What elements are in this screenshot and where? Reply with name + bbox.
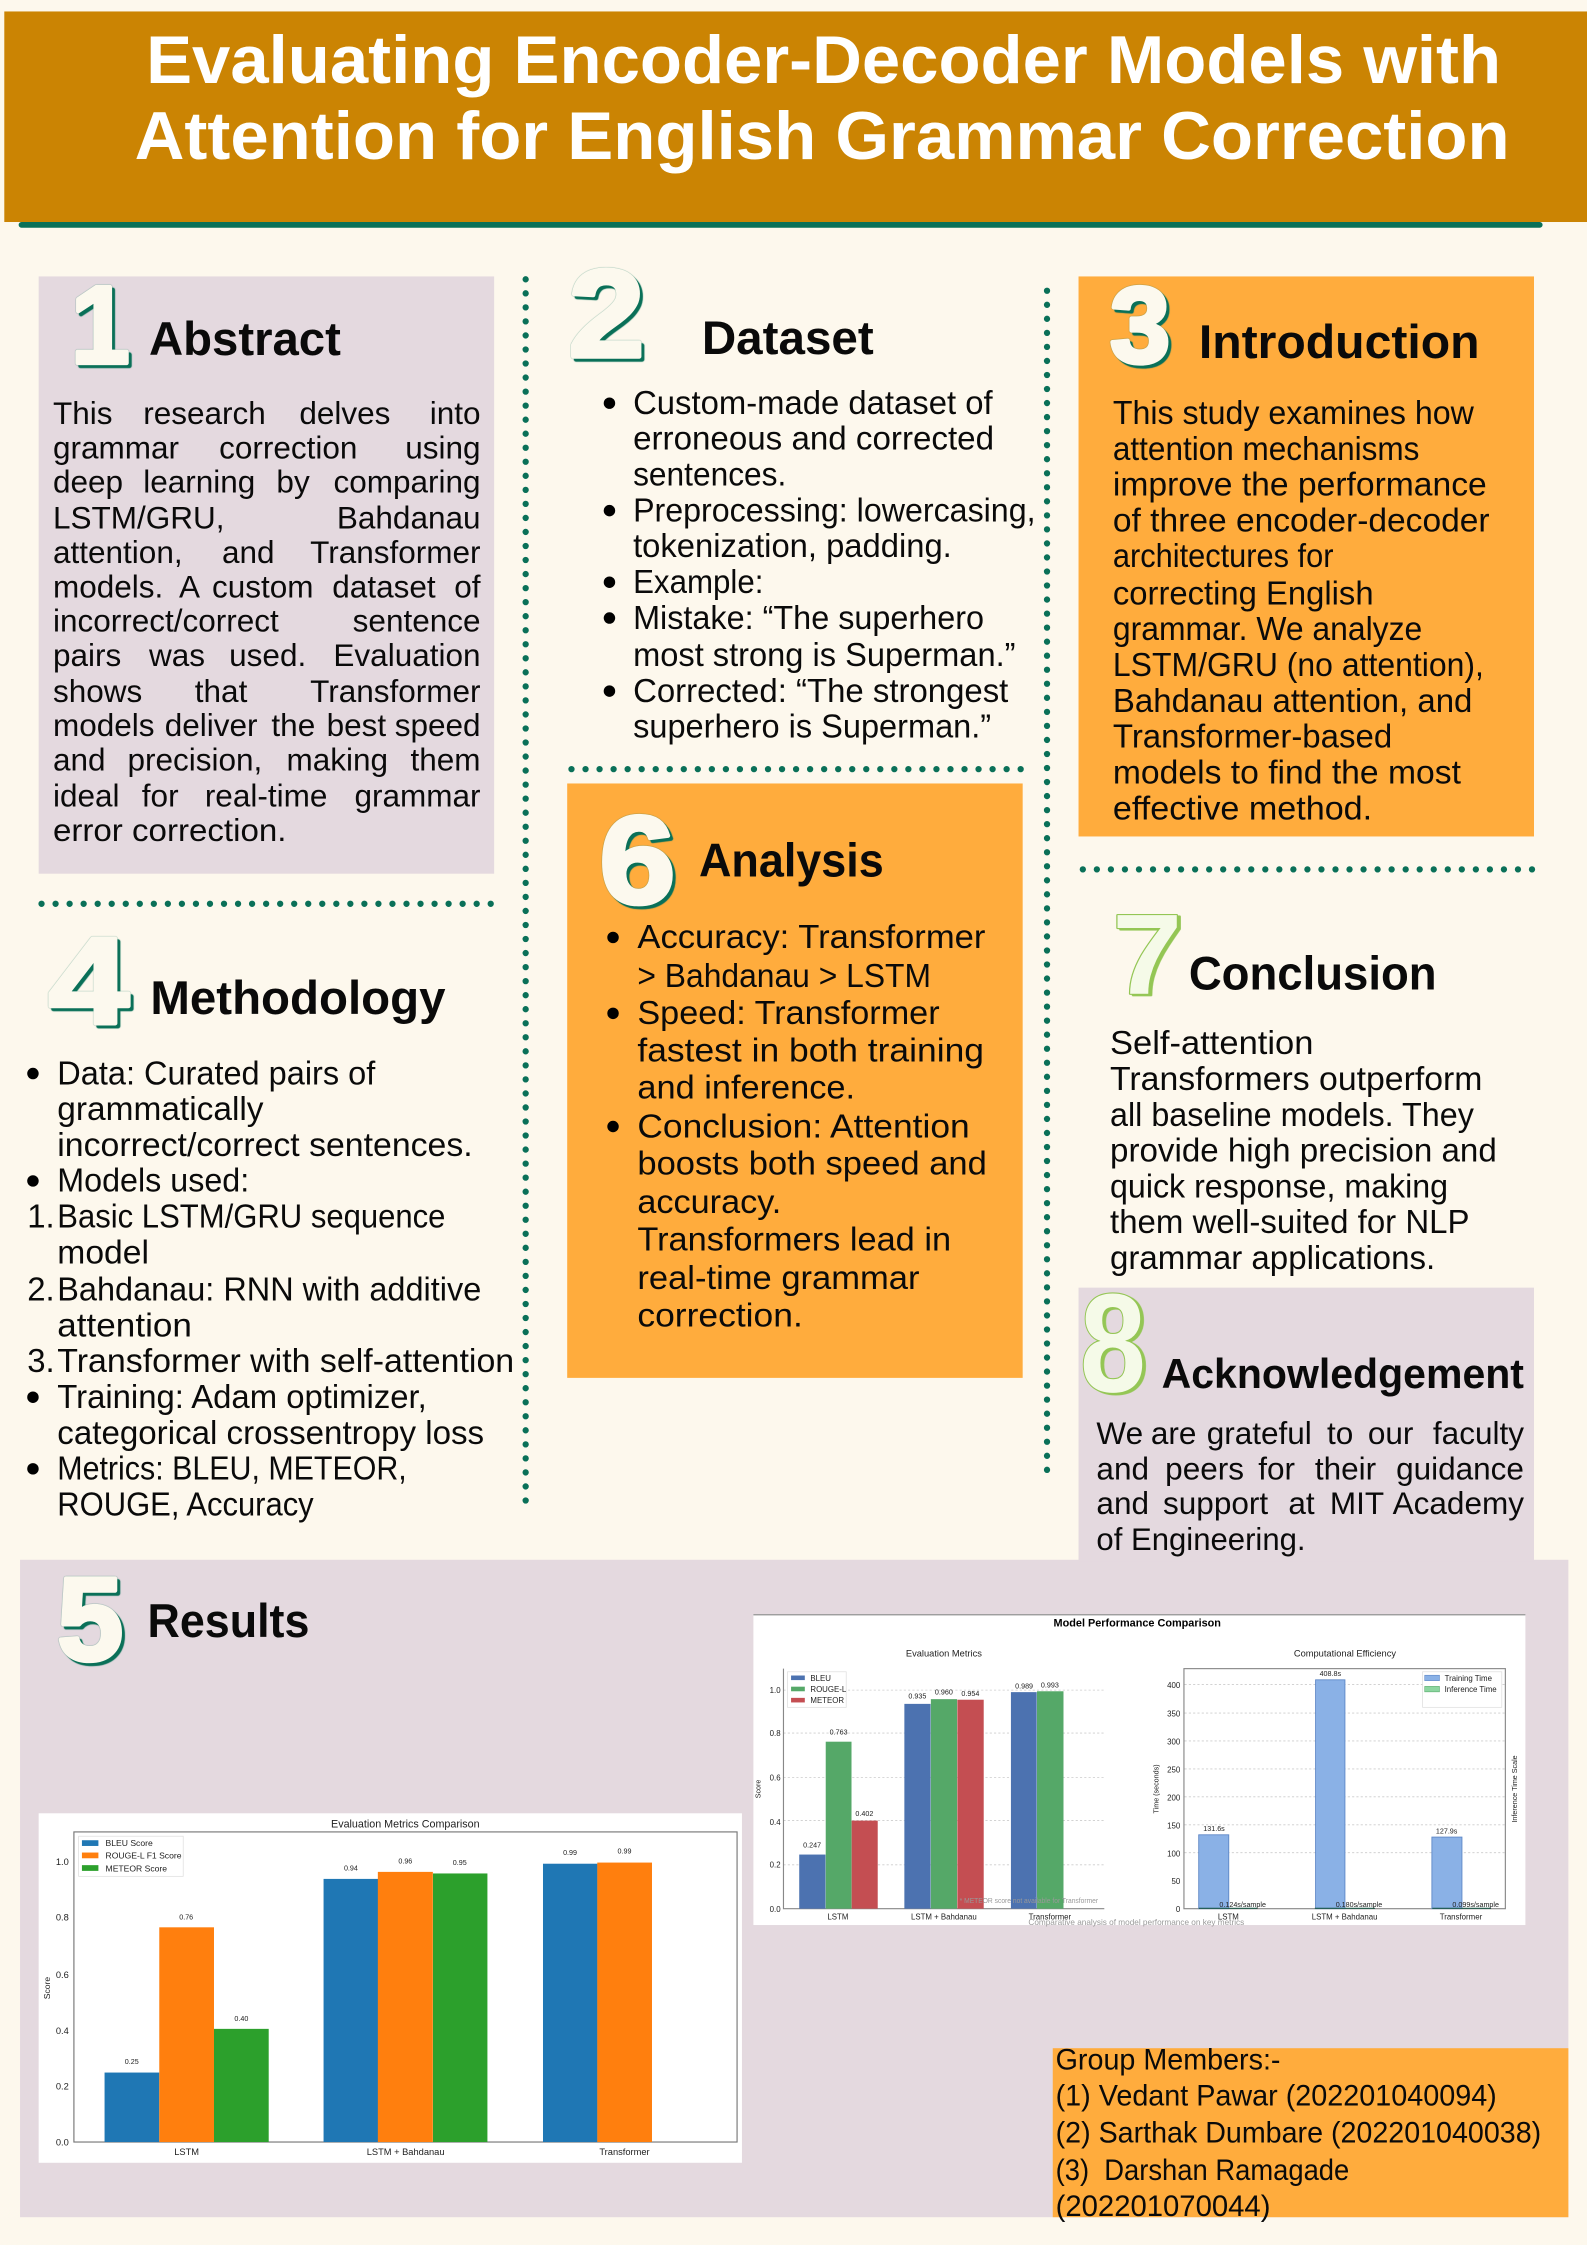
bar chart: evaluation metrics comparison: 0.4 [56, 2026, 69, 2036]
methodology list: attention [57, 1306, 192, 1343]
left subplot: evaluation metrics: Score [755, 1780, 763, 1798]
analysis bullet list: accuracy. [637, 1183, 781, 1220]
right subplot: computational efficiency: 250 [1167, 1765, 1181, 1774]
right subplot: computational efficiency: 408.8s [1320, 1670, 1341, 1678]
left subplot: evaluation metrics: Evaluation Metrics [906, 1648, 982, 1658]
abstract body text: This [53, 395, 113, 431]
abstract body text: incorrect/correct [53, 603, 279, 639]
abstract body text: real-time [205, 777, 327, 813]
methodology list: 2. [27, 1271, 55, 1308]
panel: analysis [567, 783, 1023, 1378]
heading: conclusion: Conclusion [1189, 948, 1437, 1001]
bar chart: evaluation metrics comparison: 0.96 [398, 1857, 412, 1865]
analysis bullet list: > Bahdanau > LSTM [637, 957, 931, 994]
left subplot: evaluation metrics: LSTM [827, 1912, 848, 1921]
abstract body text: models. [53, 568, 163, 604]
introduction body text: attention mechanisms [1113, 430, 1419, 467]
title: Evaluating Encoder-Decoder Models with [146, 23, 1501, 98]
bar chart: evaluation metrics comparison: Score [42, 1977, 52, 1999]
left subplot: evaluation metrics: 0.960 [935, 1688, 953, 1696]
panel: group members: (2) Sarthak Dumbare (202201040038) [1056, 2117, 1541, 2150]
left subplot: evaluation metrics: 0.935 [908, 1693, 926, 1701]
methodology list: grammatically [57, 1090, 264, 1127]
icon: number 7: 7 [1112, 890, 1182, 1018]
abstract body text: by [276, 464, 310, 500]
analysis bullet list: fastest in both training [637, 1031, 984, 1068]
abstract body text: pairs [53, 637, 121, 673]
right subplot: computational efficiency: 200 [1167, 1793, 1181, 1802]
abstract body text: into [430, 395, 481, 431]
right subplot: computational efficiency: Computational Efficiency [1294, 1648, 1396, 1658]
abstract body text: making [286, 742, 388, 778]
abstract body text: deliver [165, 707, 258, 743]
introduction body text: architectures for [1113, 537, 1333, 574]
heading: dataset: Dataset [702, 312, 874, 365]
abstract body text: for [142, 777, 179, 813]
bar chart: evaluation metrics comparison: 1.0 [56, 1857, 69, 1867]
analysis bullet list: Conclusion: Attention [637, 1107, 970, 1144]
right subplot: computational efficiency: 150 [1167, 1821, 1181, 1830]
abstract body text: custom [212, 568, 314, 604]
right subplot: computational efficiency: 400 [1167, 1681, 1181, 1690]
conclusion body text: Self-attention [1110, 1024, 1313, 1061]
methodology list: Transformer with self-attention [57, 1342, 514, 1379]
bar chart: evaluation metrics comparison: Transformer [599, 2147, 650, 2157]
abstract body text: correction [219, 429, 357, 465]
bar chart: evaluation metrics comparison: 0.6 [56, 1970, 69, 1980]
conclusion body text: them well-suited for NLP [1110, 1203, 1470, 1240]
abstract body text: using [405, 429, 481, 465]
abstract body text: research [143, 395, 266, 431]
left subplot: evaluation metrics: 0.6 [770, 1773, 781, 1782]
abstract body text: shows [53, 673, 142, 709]
right subplot: computational efficiency: Inference Time [1445, 1685, 1497, 1694]
dataset bullet list: most strong is Superman.” [633, 636, 1016, 673]
dataset bullet list: superhero is Superman.” [633, 708, 991, 745]
abstract body text: LSTM/GRU, [53, 500, 225, 536]
right subplot: computational efficiency: 127.9s [1436, 1827, 1458, 1835]
conclusion body text: Transformers outperform [1110, 1060, 1482, 1097]
title [135, 23, 1510, 174]
icon: number 1: 1 [71, 264, 130, 387]
conclusion body text: all baseline models. They [1110, 1096, 1474, 1133]
analysis bullet list: Accuracy: Transformer [637, 918, 985, 955]
bar chart: evaluation metrics comparison: 0.95 [453, 1859, 467, 1867]
bar chart: evaluation metrics comparison: 0.99 [618, 1847, 631, 1855]
heading: results: Results [148, 1595, 309, 1648]
analysis bullet list: real-time grammar [637, 1259, 920, 1296]
conclusion body text: grammar applications. [1110, 1239, 1435, 1276]
panel: group members [1053, 2044, 1568, 2223]
abstract body text: Transformer [310, 673, 481, 709]
right subplot: computational efficiency [1153, 1648, 1519, 1921]
bar chart: evaluation metrics comparison: 0.8 [56, 1913, 69, 1923]
abstract body text: and [222, 534, 275, 570]
abstract body text: A [179, 568, 200, 604]
bar chart: model performance comparison: Comparative analysis of model performance on key metrics [1028, 1917, 1244, 1927]
icon: number 6: 6 [599, 791, 675, 930]
methodology list: Bahdanau: RNN with additive [57, 1271, 481, 1308]
bar chart: evaluation metrics comparison: 0.0 [56, 2138, 69, 2148]
icon: number 5: 5 [57, 1554, 123, 1685]
left subplot: evaluation metrics: 0.4 [770, 1818, 781, 1827]
methodology list: incorrect/correct sentences. [57, 1126, 473, 1163]
left subplot: evaluation metrics [755, 1648, 1104, 1921]
icon: number 8: 8 [1080, 1264, 1146, 1421]
conclusion body text: quick response, making [1110, 1167, 1448, 1204]
methodology list: Models used: [57, 1162, 249, 1199]
left subplot: evaluation metrics: Transformer [1029, 1912, 1072, 1921]
panel: group members: Group Members:- [1056, 2044, 1280, 2077]
analysis bullet list: Transformers lead in [637, 1220, 951, 1257]
abstract body text: the [271, 707, 315, 743]
abstract body text: was [148, 637, 205, 673]
acknowledgement body text: at [1288, 1485, 1315, 1521]
panel: methodology [27, 912, 514, 1522]
bar chart: model performance comparison [753, 1614, 1525, 1927]
introduction body text: correcting English [1113, 574, 1374, 611]
dataset bullet list: sentences. [633, 456, 786, 493]
left subplot: evaluation metrics: METEOR [810, 1696, 844, 1705]
abstract body text: precision, [127, 742, 262, 778]
introduction body text: models to find the most [1113, 753, 1461, 790]
acknowledgement body text: for [1258, 1451, 1295, 1487]
methodology list: categorical crossentropy loss [57, 1414, 484, 1451]
heading: abstract: Abstract [149, 313, 341, 366]
introduction body text: This study examines how [1113, 394, 1474, 431]
left subplot: evaluation metrics: 0.8 [770, 1729, 781, 1738]
acknowledgement body text: peers [1165, 1451, 1244, 1487]
abstract body text: models [53, 707, 155, 743]
methodology list: ROUGE, Accuracy [57, 1485, 314, 1522]
abstract body text: ideal [53, 777, 120, 813]
right subplot: computational efficiency: 50 [1171, 1877, 1181, 1886]
dataset bullet list: Custom-made dataset of [633, 384, 993, 421]
bar chart: evaluation metrics comparison: 0.94 [344, 1865, 358, 1873]
introduction body text [1113, 394, 1490, 826]
abstract body text: delves [299, 395, 390, 431]
bar chart: evaluation metrics comparison: 0.40 [234, 2015, 248, 2023]
right subplot: computational efficiency: Training Time [1445, 1674, 1493, 1683]
panel: dataset [569, 245, 1036, 745]
panel: introduction [1079, 265, 1534, 836]
panel: acknowledgement [1079, 1264, 1534, 1561]
abstract body text: dataset [332, 568, 436, 604]
bar chart: evaluation metrics comparison: 0.2 [56, 2082, 69, 2092]
right subplot: computational efficiency: 0.099s/sample [1452, 1901, 1499, 1909]
right subplot: computational efficiency: LSTM + Bahdanau [1312, 1912, 1378, 1921]
bar chart: evaluation metrics comparison: ROUGE-L F1 Score [106, 1851, 182, 1861]
bar chart: evaluation metrics comparison: 0.25 [125, 2058, 139, 2066]
methodology list: 1. [27, 1197, 55, 1234]
abstract body text: sentence [353, 603, 481, 639]
analysis bullet list: Speed: Transformer [637, 994, 940, 1031]
left subplot: evaluation metrics: 0.402 [855, 1810, 873, 1818]
methodology list: Basic LSTM/GRU sequence [57, 1197, 445, 1234]
left subplot: evaluation metrics: 0.993 [1041, 1681, 1059, 1689]
bar chart: evaluation metrics comparison: LSTM [174, 2147, 199, 2157]
left subplot: evaluation metrics: 0.954 [961, 1690, 979, 1698]
acknowledgement body text: faculty [1433, 1415, 1524, 1451]
abstract body text: attention, [53, 534, 183, 570]
left subplot: evaluation metrics: LSTM + Bahdanau [911, 1912, 977, 1921]
conclusion body text [1110, 1024, 1497, 1276]
acknowledgement body text: support [1163, 1485, 1268, 1521]
left subplot: evaluation metrics: ROUGE-L [810, 1685, 847, 1694]
introduction body text: effective method. [1113, 789, 1372, 826]
left subplot: evaluation metrics: 1.0 [770, 1686, 781, 1695]
dataset bullet list: Mistake: “The superhero [633, 599, 984, 636]
abstract body text: error correction. [53, 812, 286, 848]
heading: analysis: Analysis [699, 835, 884, 888]
abstract body text: grammar [53, 429, 179, 465]
panel: conclusion [1110, 890, 1497, 1276]
abstract body text: them [411, 742, 481, 778]
abstract body text [53, 395, 481, 848]
acknowledgement body text: We [1096, 1415, 1143, 1451]
acknowledgement body text: our [1368, 1415, 1413, 1451]
acknowledgement body text: grateful [1207, 1415, 1312, 1451]
right subplot: computational efficiency: 0.180s/sample [1336, 1901, 1382, 1909]
conclusion body text: provide high precision and [1110, 1132, 1497, 1169]
acknowledgement body text: and [1096, 1485, 1149, 1521]
abstract body text: Evaluation [333, 637, 481, 673]
bar chart: evaluation metrics comparison: 0.99 [563, 1849, 577, 1857]
left subplot: evaluation metrics: BLEU [810, 1674, 831, 1683]
abstract body text: used. [229, 637, 306, 673]
panel: abstract [39, 264, 494, 874]
acknowledgement body text: are [1151, 1415, 1196, 1451]
right subplot: computational efficiency: 0 [1176, 1905, 1181, 1914]
abstract body text: deep [53, 464, 123, 500]
abstract body text: and [53, 742, 106, 778]
right subplot: computational efficiency: Transformer [1440, 1912, 1483, 1921]
introduction body text: improve the performance [1113, 466, 1487, 503]
acknowledgement body text [1096, 1415, 1524, 1557]
icon: number 3: 3 [1110, 265, 1170, 385]
methodology list [27, 1054, 514, 1522]
bar chart: model performance comparison: Model Performance Comparison [1054, 1617, 1221, 1629]
panel: group members: (3) Darshan Ramagade [1056, 2154, 1349, 2187]
bar chart: evaluation metrics comparison: METEOR Score [106, 1863, 167, 1873]
abstract body text: speed [395, 707, 481, 743]
introduction body text: Transformer-based [1113, 718, 1392, 755]
acknowledgement body text: MIT [1330, 1485, 1384, 1521]
left subplot: evaluation metrics: 0.2 [770, 1861, 781, 1870]
abstract body text: best [327, 707, 386, 743]
left subplot: evaluation metrics: 0.247 [803, 1842, 821, 1850]
dataset bullet list: tokenization, padding. [633, 527, 952, 564]
left subplot: evaluation metrics: 0.0 [770, 1905, 781, 1914]
bar chart: evaluation metrics comparison [39, 1813, 742, 2163]
heading: methodology: Methodology [150, 972, 446, 1025]
dataset bullet list: Preprocessing: lowercasing, [633, 491, 1036, 528]
icon: number 2: 2 [569, 245, 645, 384]
header banner [4, 11, 1587, 228]
title: Attention for English Grammar Correction [135, 99, 1510, 174]
left subplot: evaluation metrics: * METEOR score not available for Transformer [960, 1897, 1099, 1905]
abstract body text: comparing [333, 464, 481, 500]
left subplot: evaluation metrics: 0.989 [1015, 1683, 1033, 1691]
analysis bullet list: boosts both speed and [637, 1144, 987, 1181]
abstract body text: learning [143, 464, 255, 500]
introduction body text: Bahdanau attention, and [1113, 682, 1472, 719]
dataset bullet list: Example: [633, 563, 763, 600]
right subplot: computational efficiency: 131.6s [1203, 1825, 1225, 1833]
acknowledgement body text: and [1096, 1451, 1149, 1487]
acknowledgement body text: their [1315, 1451, 1376, 1487]
abstract body text: Bahdanau [337, 500, 481, 536]
panel: group members: (202201070044) [1056, 2190, 1270, 2223]
bar chart: evaluation metrics comparison: 0.76 [179, 1913, 193, 1921]
bar chart: evaluation metrics comparison: BLEU Score [106, 1838, 153, 1848]
abstract body text: grammar [355, 777, 481, 813]
bar chart: evaluation metrics comparison: Evaluation Metrics Comparison [331, 1819, 480, 1831]
right subplot: computational efficiency: Time (seconds) [1153, 1764, 1161, 1813]
methodology list: Data: Curated pairs of [57, 1054, 376, 1091]
heading: acknowledgement: Acknowledgement [1162, 1350, 1524, 1397]
acknowledgement body text: guidance [1396, 1451, 1524, 1487]
abstract body text: that [195, 673, 248, 709]
right subplot: computational efficiency: Inference Time Scale [1511, 1755, 1519, 1823]
panel: group members: (1) Vedant Pawar (202201040094) [1056, 2079, 1497, 2112]
abstract body text: of [454, 568, 481, 604]
analysis bullet list: and inference. [637, 1069, 855, 1106]
methodology list: Training: Adam optimizer, [57, 1378, 427, 1415]
acknowledgement body text: Academy [1393, 1485, 1524, 1521]
icon: number 4: 4 [49, 912, 129, 1050]
dataset bullet list [604, 384, 1036, 745]
right subplot: computational efficiency: 100 [1167, 1849, 1181, 1858]
right subplot: computational efficiency: 0.124s/sample [1219, 1901, 1266, 1909]
heading: introduction: Introduction [1199, 316, 1480, 369]
abstract body text: Transformer [310, 534, 481, 570]
introduction body text: of three encoder-decoder [1113, 501, 1490, 538]
acknowledgement body text: to [1327, 1415, 1353, 1451]
analysis bullet list: correction. [637, 1296, 803, 1333]
dataset bullet list: Corrected: “The strongest [633, 672, 1008, 709]
right subplot: computational efficiency: LSTM [1218, 1912, 1239, 1921]
introduction body text: LSTM/GRU (no attention), [1113, 646, 1484, 683]
methodology list: model [57, 1233, 149, 1270]
introduction body text: grammar. We analyze [1113, 610, 1422, 647]
methodology list: Metrics: BLEU, METEOR, [57, 1450, 407, 1487]
dataset bullet list: erroneous and corrected [633, 420, 994, 457]
left subplot: evaluation metrics: 0.763 [830, 1729, 848, 1737]
analysis bullet list [607, 918, 987, 1333]
panel: results [20, 1554, 1568, 2223]
bar chart: evaluation metrics comparison: LSTM + Bahdanau [367, 2147, 445, 2157]
acknowledgement body text: of Engineering. [1096, 1521, 1306, 1557]
right subplot: computational efficiency: 300 [1167, 1738, 1181, 1747]
right subplot: computational efficiency: 350 [1167, 1710, 1181, 1719]
methodology list: 3. [27, 1342, 55, 1379]
